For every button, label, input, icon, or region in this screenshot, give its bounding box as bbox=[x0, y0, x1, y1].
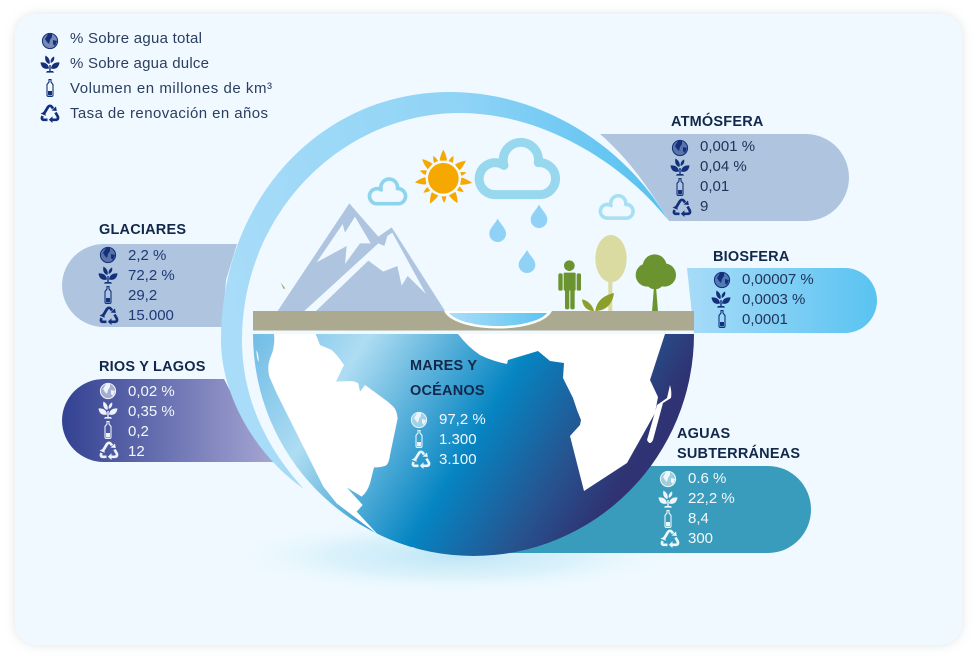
biosfera values: 0,00007 % bbox=[742, 271, 814, 288]
rain drops bbox=[489, 205, 547, 273]
rios values: 0,02 % bbox=[128, 383, 175, 400]
aguas values: 0.6 % bbox=[688, 470, 726, 487]
crescent arc bbox=[221, 92, 668, 489]
island: sliver bbox=[647, 385, 671, 443]
atmosfera pill bbox=[600, 134, 849, 221]
person bbox=[558, 260, 581, 309]
grass mark bbox=[281, 282, 285, 289]
biosfera pill bbox=[687, 268, 877, 333]
mares values bbox=[411, 411, 486, 469]
panel: biosfera bbox=[687, 249, 877, 333]
aguas heading line 2: SUBTERRÁNEAS bbox=[677, 445, 800, 462]
biosfera values bbox=[712, 271, 814, 328]
rios values: 12 bbox=[128, 443, 145, 460]
panel: rios y lagos bbox=[62, 359, 274, 462]
ground shadow bbox=[227, 518, 683, 594]
atmosfera values: 0,04 % bbox=[700, 158, 747, 175]
panel: mares y oceanos labels bbox=[410, 358, 486, 469]
glaciares values: 29,2 bbox=[128, 287, 157, 304]
cloud: small left bbox=[369, 179, 406, 204]
aguas pill bbox=[500, 466, 811, 553]
rios values: 0,2 bbox=[128, 423, 149, 440]
mares values: 1.300 bbox=[439, 431, 477, 448]
panel: aguas subterraneas bbox=[500, 426, 811, 553]
glaciares values bbox=[98, 247, 175, 325]
legend row: total water: % Sobre agua total bbox=[70, 30, 202, 47]
aguas values: 22,2 % bbox=[688, 490, 735, 507]
rios heading: RIOS Y LAGOS bbox=[99, 359, 206, 375]
legend bbox=[40, 30, 272, 123]
rios pill bbox=[62, 379, 274, 462]
legend row: volume: Volumen en millones de km³ bbox=[70, 80, 272, 97]
aguas heading: AGUAS bbox=[677, 426, 730, 442]
glaciares values: 72,2 % bbox=[128, 267, 175, 284]
pale tree bbox=[595, 235, 627, 312]
glaciares values: 2,2 % bbox=[128, 247, 166, 264]
glaciares values: 15.000 bbox=[128, 307, 174, 324]
mares values: 3.100 bbox=[439, 451, 477, 468]
aguas values: 300 bbox=[688, 530, 713, 547]
continents east bbox=[458, 334, 672, 491]
glaciares heading: GLACIARES bbox=[99, 222, 186, 238]
rios values: 0,35 % bbox=[128, 403, 175, 420]
atmosfera values: 9 bbox=[700, 198, 708, 215]
biosfera heading: BIOSFERA bbox=[713, 249, 790, 265]
continent: africa and eurasia bbox=[458, 334, 665, 491]
icon: sun bbox=[414, 150, 473, 205]
island: bottom mark bbox=[410, 546, 415, 548]
mares heading: MARES Y bbox=[410, 358, 477, 374]
oceanos heading: OCÉANOS bbox=[410, 382, 485, 399]
bottom highlight bbox=[468, 548, 540, 557]
atmosfera heading: ATMÓSFERA bbox=[671, 112, 764, 130]
aguas values: 8,4 bbox=[688, 510, 709, 527]
biosfera values: 0,0001 bbox=[742, 311, 788, 328]
mares values: 97,2 % bbox=[439, 411, 486, 428]
biosfera values: 0,0003 % bbox=[742, 291, 805, 308]
atmosfera values: 0,01 bbox=[700, 178, 729, 195]
lake bbox=[444, 311, 552, 328]
green tree bbox=[636, 254, 676, 312]
atmosfera values bbox=[670, 138, 755, 217]
cloud: large bbox=[479, 142, 556, 195]
continent: americas bbox=[268, 334, 398, 535]
aguas values bbox=[658, 470, 735, 548]
legend row: fresh water: % Sobre agua dulce bbox=[70, 55, 209, 72]
continents west bbox=[256, 334, 415, 549]
glaciares pill bbox=[62, 244, 237, 327]
legend row: renewal rate: Tasa de renovación en años bbox=[70, 105, 268, 122]
scene above ground bbox=[278, 142, 676, 312]
cloud: small right bbox=[600, 196, 633, 218]
leaves bbox=[582, 293, 614, 311]
panel: glaciares bbox=[62, 222, 237, 327]
ground strip bbox=[253, 311, 694, 330]
rios values bbox=[98, 383, 175, 460]
ocean bbox=[250, 334, 696, 560]
globe bbox=[250, 334, 696, 560]
atmosfera values: 0,001 % bbox=[700, 138, 755, 155]
mountains bbox=[278, 203, 445, 311]
island: left mark bbox=[256, 350, 259, 362]
panel: atmosfera bbox=[600, 112, 849, 221]
